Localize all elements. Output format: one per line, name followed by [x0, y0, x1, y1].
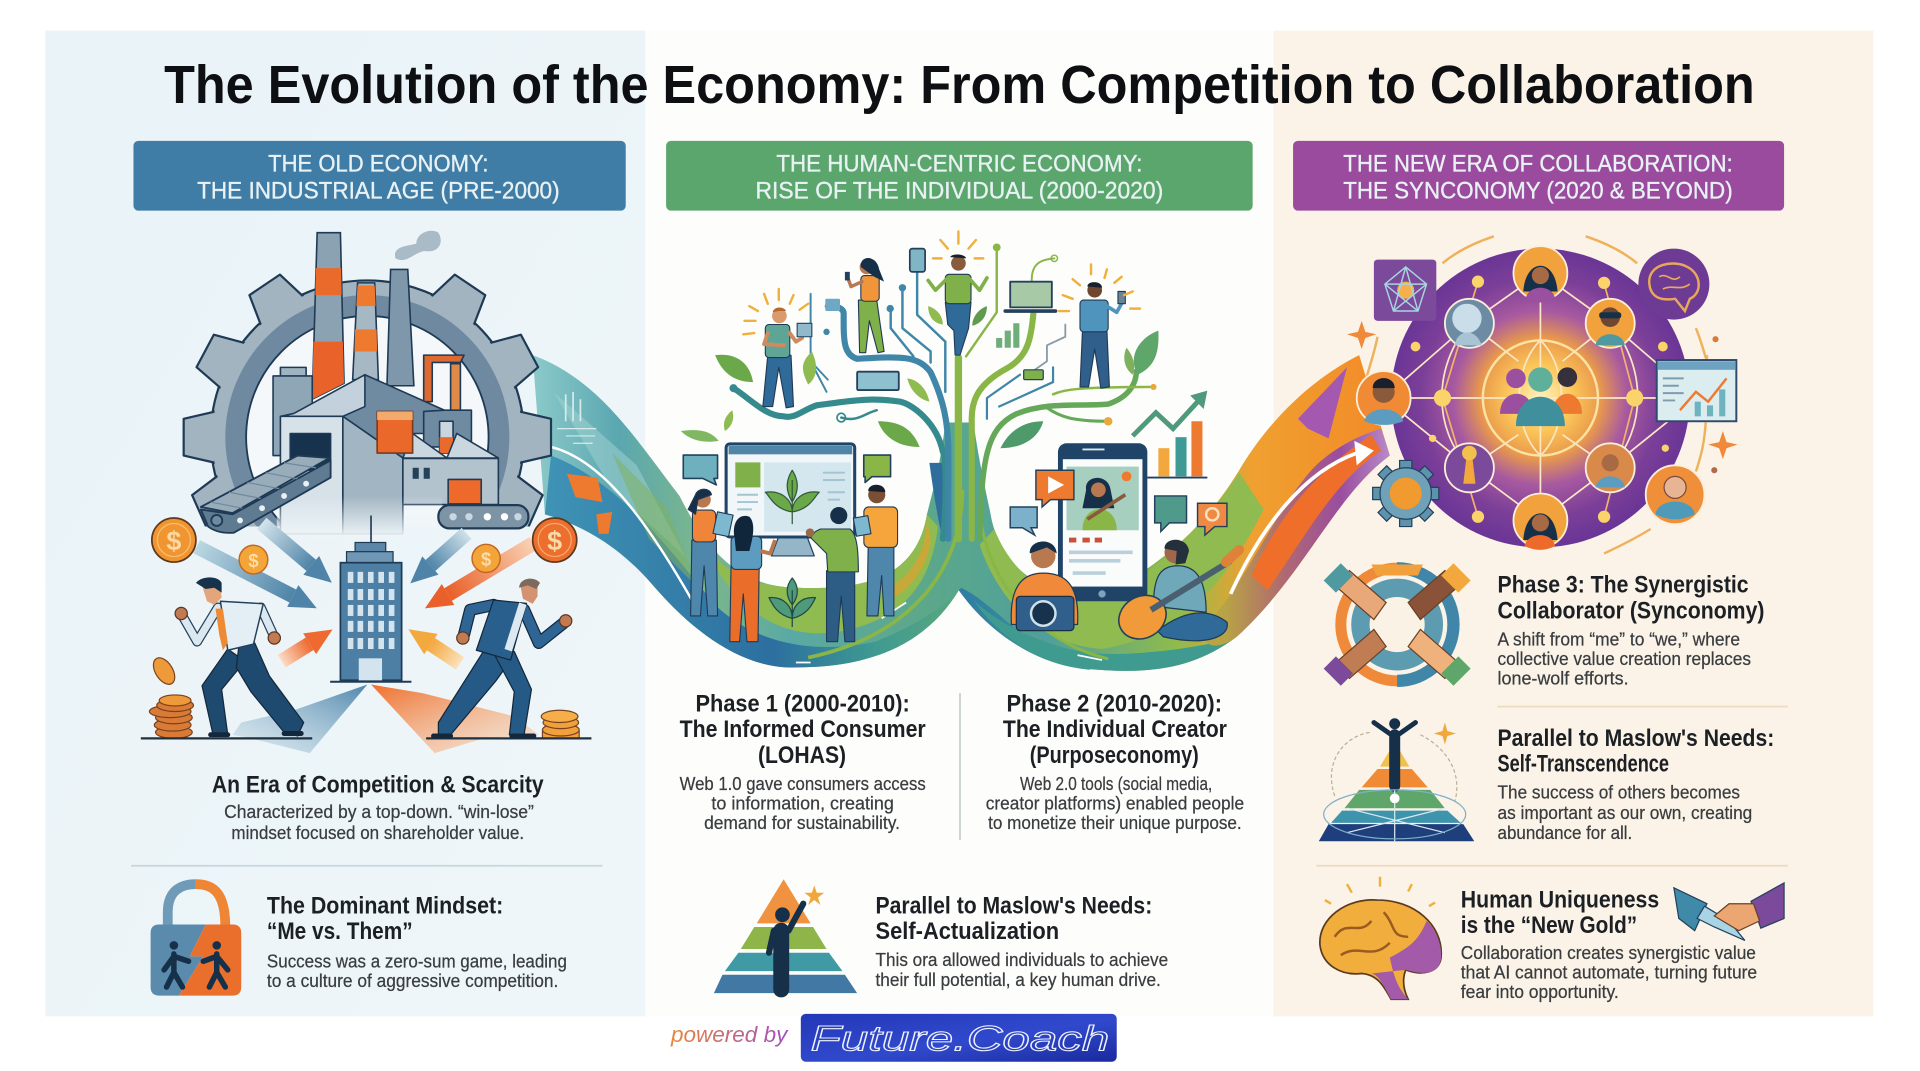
fade at factory base [277, 496, 442, 538]
text: human uniqueness: that AI cannot automate, turning future [1461, 961, 1757, 982]
text: dominant mindset: Success was a zero-sum game, leading [267, 950, 567, 971]
text: dominant mindset: “Me vs. Them” [267, 918, 413, 945]
text: self-transcendence: The success of others becomes [1498, 781, 1740, 802]
text: human uniqueness: is the “New Gold” [1461, 912, 1637, 939]
tower [330, 516, 411, 682]
guitarist [1111, 540, 1239, 647]
text: phase 2: Phase 2 (2010-2020): [1007, 690, 1222, 717]
coins: $ [481, 549, 491, 570]
leaves [681, 306, 1159, 448]
header: human-centric economy: THE HUMAN-CENTRIC ECONOMY: [776, 150, 1142, 177]
header: new era: THE NEW ERA OF COLLABORATION: [1343, 150, 1733, 177]
text: maslow self-actualization [876, 893, 1168, 990]
header: old economy [133, 141, 626, 211]
coins: $ [248, 550, 259, 571]
panel: human-centric economy background [645, 31, 1273, 1016]
woman with phone [845, 258, 884, 353]
illustration: digital tree of individuals [681, 231, 1159, 539]
text: phase 3 [1498, 572, 1764, 689]
text: phase 3: collective value creation replaces [1498, 648, 1751, 669]
text: human uniqueness: fear into opportunity. [1461, 981, 1619, 1002]
text: maslow self-actualization: their full potential, a key human drive. [876, 969, 1161, 990]
text: dominant mindset [267, 893, 567, 991]
man with camera [1011, 542, 1078, 631]
left businessman [175, 577, 304, 736]
text: phase 1: to information, creating [711, 792, 894, 813]
header: human-centric economy: RISE OF THE INDIVIDUAL (2000-2020) [756, 177, 1163, 204]
text: phase 2: creator platforms) enabled people [986, 792, 1244, 813]
text: self-transcendence: Parallel to Maslow's Needs: [1498, 725, 1774, 752]
avatars [1357, 246, 1704, 547]
text: dominant mindset: The Dominant Mindset: [267, 893, 503, 920]
network lines [1404, 287, 1668, 512]
text: human uniqueness [1461, 886, 1757, 1002]
trunk and branches [730, 243, 1157, 539]
text: maslow self-actualization: Parallel to Maslow's Needs: [876, 893, 1152, 920]
conveyor belt [201, 456, 331, 533]
text: era of competition [212, 771, 544, 843]
coin stacks [149, 695, 579, 738]
title: The Evolution of the Economy: From Competition to Collaboration [164, 55, 1755, 115]
text: phase 3: lone-wolf efforts. [1498, 668, 1629, 689]
text: self-transcendence: Self-Transcendence [1498, 750, 1669, 777]
man with open arms [928, 231, 987, 355]
text: phase 2: Web 2.0 tools (social media, [1020, 773, 1212, 794]
footer: Future.Coach logo: Future.Coach [811, 1019, 1109, 1059]
people [688, 485, 898, 642]
icon: handshake [1674, 883, 1784, 940]
gear [182, 274, 552, 526]
factory buildings [273, 355, 498, 534]
text: self-transcendence [1498, 725, 1774, 843]
icon: self-actualization pyramid [714, 879, 857, 993]
header: old economy: THE INDUSTRIAL AGE (PRE-2000) [197, 177, 560, 204]
icon: split padlock [151, 884, 241, 996]
speech bubbles [683, 455, 891, 485]
plant sapling [769, 578, 816, 627]
arrows [197, 523, 533, 663]
coins [149, 518, 577, 688]
text: phase 1: The Informed Consumer [680, 716, 926, 743]
monitor [726, 444, 855, 556]
icon: glowing brain [1320, 877, 1441, 999]
text: human uniqueness: Human Uniqueness [1461, 886, 1659, 913]
text: dominant mindset: to a culture of aggressive competition. [267, 970, 558, 991]
floating social bubbles [1010, 470, 1227, 535]
text: phase 2: (Purposeconomy) [1030, 742, 1199, 769]
coins: $ [166, 526, 181, 556]
text: phase 1: Web 1.0 gave consumers access [680, 773, 926, 794]
illustration: arrows converging on corporate tower [141, 516, 591, 753]
arcs and sparkles [1365, 236, 1707, 554]
text: era of competition: An Era of Competition & Scarcity [212, 771, 544, 798]
text: maslow self-actualization: This ora allowed individuals to achieve [876, 949, 1168, 970]
text: phase 1: Phase 1 (2000-2010): [696, 690, 910, 717]
panel: old economy background [45, 31, 645, 1016]
brain medallion [1638, 249, 1709, 320]
panel: new era background [1273, 31, 1873, 1016]
flowing ribbon connecting the three eras [533, 355, 1390, 671]
person with tablet on left branch [743, 289, 812, 408]
text: era of competition: mindset focused on shareholder value. [231, 822, 524, 843]
text: phase 2: to monetize their unique purpose. [988, 812, 1242, 833]
text: self-transcendence: as important as our own, creating [1498, 802, 1752, 823]
text: phase 1: demand for sustainability. [704, 812, 900, 833]
chimneys [312, 233, 414, 399]
ground lines [141, 737, 591, 739]
text: phase 3: Collaborator (Synconomy) [1498, 597, 1764, 624]
glowing nodes [1411, 276, 1669, 523]
icon: self-transcendence pyramid [1319, 718, 1474, 841]
icon: four hands on gear [1324, 563, 1471, 686]
text: phase 2: The Individual Creator [1003, 716, 1227, 743]
gear medallion [1359, 447, 1452, 540]
footer: powered by: powered by [670, 1022, 789, 1047]
illustration: phone and creators [1010, 391, 1239, 647]
text: self-transcendence: abundance for all. [1498, 822, 1632, 843]
text: phase 3: A shift from “me” to “we,” where [1498, 628, 1740, 649]
globe [1391, 249, 1690, 547]
illustration: synconomy network globe [1347, 236, 1738, 554]
header: new era: THE SYNCONOMY (2020 & BEYOND) [1343, 177, 1733, 204]
crawler base [438, 505, 528, 528]
text: era of competition: Characterized by a top-down. “win-lose” [224, 801, 534, 822]
text: human uniqueness: Collaboration creates synergistic value [1461, 942, 1756, 963]
growth chart [1133, 391, 1207, 478]
text: phase 1: (LOHAS) [758, 742, 846, 769]
header: new era [1293, 141, 1784, 211]
smartphone [1058, 443, 1147, 601]
central people [1500, 367, 1582, 426]
text: phase 1 [680, 690, 926, 833]
ground wedges [233, 685, 367, 753]
man with phone on right branch [1059, 265, 1140, 388]
footer: Future.Coach logo [801, 1014, 1117, 1062]
header: human-centric economy [666, 141, 1253, 211]
text: phase 2 [986, 690, 1244, 833]
analytics window [1657, 360, 1736, 421]
network tile [1374, 260, 1436, 321]
coins: $ [547, 526, 562, 556]
smoke [395, 231, 441, 260]
small floating devices [825, 249, 1056, 390]
illustration: factory inside gear [182, 230, 552, 534]
illustration: group around monitor [683, 444, 898, 642]
header: old economy: THE OLD ECONOMY: [268, 150, 489, 177]
text: phase 3: Phase 3: The Synergistic [1498, 572, 1749, 599]
text: maslow self-actualization: Self-Actualization [876, 918, 1059, 945]
right businessman [433, 579, 572, 736]
